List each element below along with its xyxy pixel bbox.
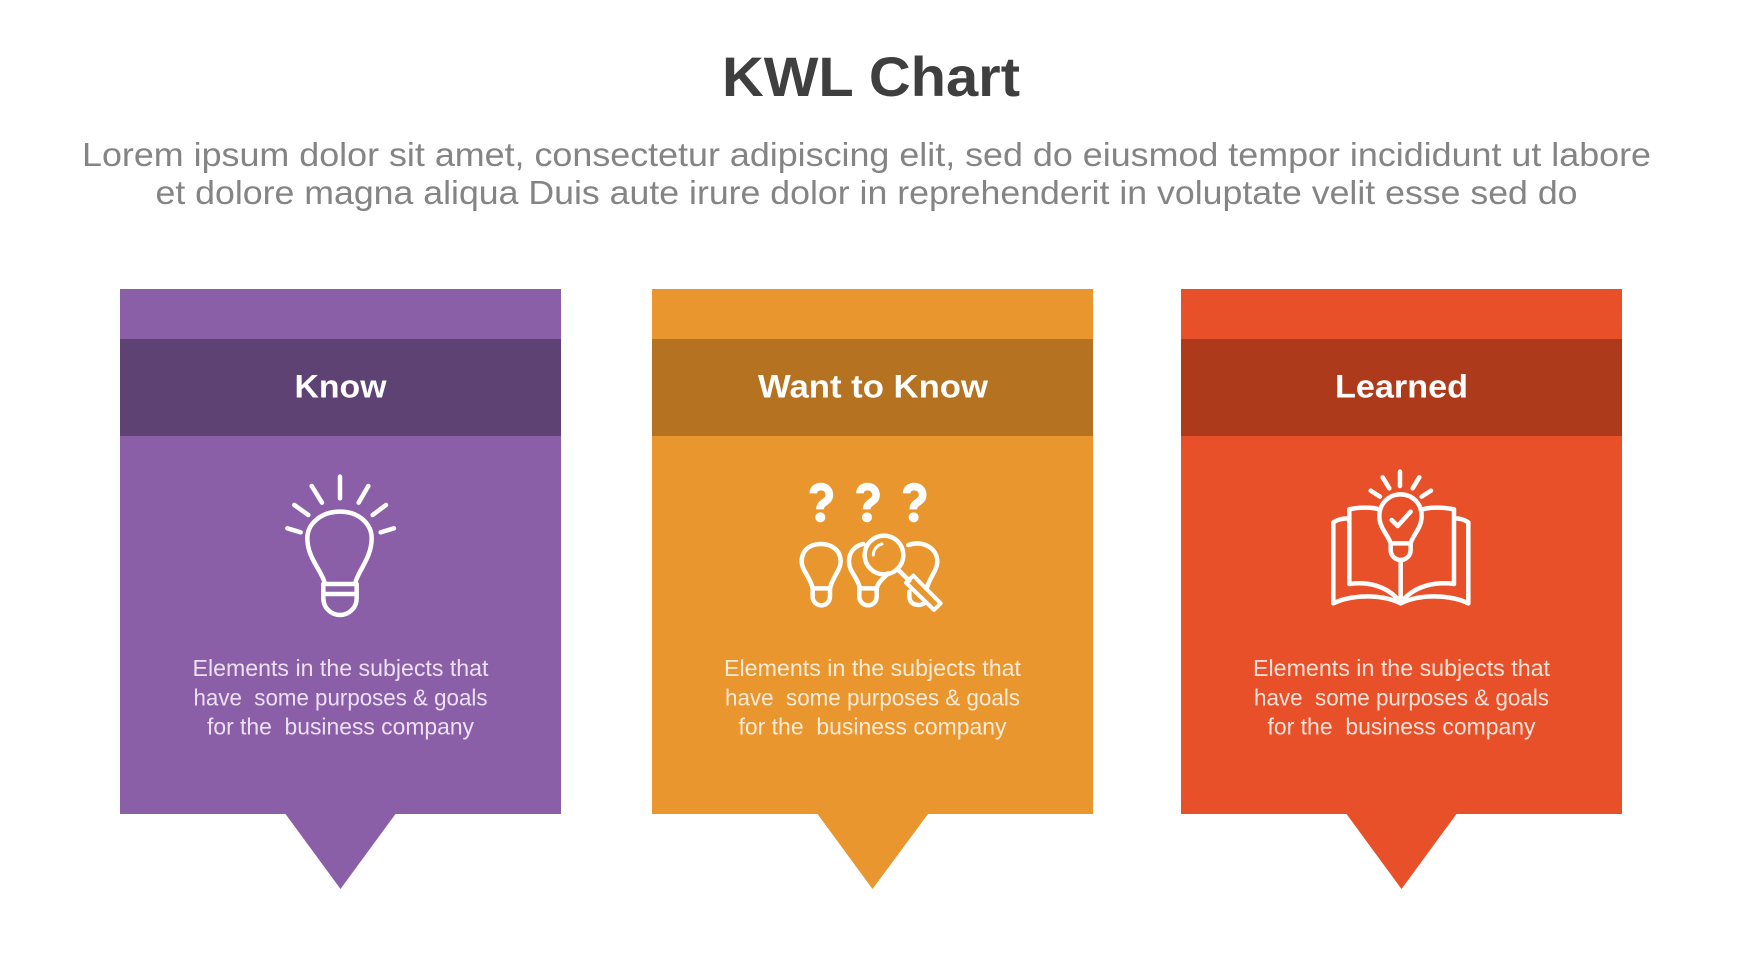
heading: Learned: Learned [1335,368,1468,404]
subtitle text: et dolore magna aliqua Duis aute irure dolor in reprehenderit in voluptate velit esse sed do [156,174,1578,211]
description: Learned: Elements in the subjects that [1253,655,1551,681]
description: Learned: have some purposes & goals [1254,684,1549,710]
panel: Know [120,289,561,889]
panel: Want to Know [652,289,1093,889]
description: Know: Elements in the subjects that [192,655,489,681]
icon: light bulb [287,477,394,615]
description: Know: for the business company [207,714,474,740]
header band: Learned [1181,339,1622,436]
header band: Know [120,339,561,436]
header band: Want to Know [652,339,1093,436]
description: Know: have some purposes & goals [194,684,488,710]
icon: open book with bulb [1333,472,1468,603]
description: Learned [1253,655,1551,740]
description: Want to Know [724,655,1022,740]
panel body: Want to Know [652,289,1093,889]
subtitle text: Lorem ipsum dolor sit amet, consectetur adipiscing elit, sed do eiusmod tempor incididunt ut labore [82,136,1651,173]
panel body: Know [120,289,561,889]
description: Learned: for the business company [1268,714,1536,740]
description: Want to Know: have some purposes & goals [725,684,1020,710]
heading: Want to Know: Want to Know [758,368,988,404]
icon: question marks, bulbs and magnifier [802,487,941,610]
description: Want to Know: for the business company [738,714,1007,740]
heading: Know: Know [294,368,387,404]
panel body: Learned [1181,289,1622,889]
description: Know [192,655,489,740]
title: KWL Chart [722,45,1020,108]
panel: Learned [1181,289,1622,889]
description: Want to Know: Elements in the subjects that [724,655,1022,681]
subtitle text [82,136,1651,211]
